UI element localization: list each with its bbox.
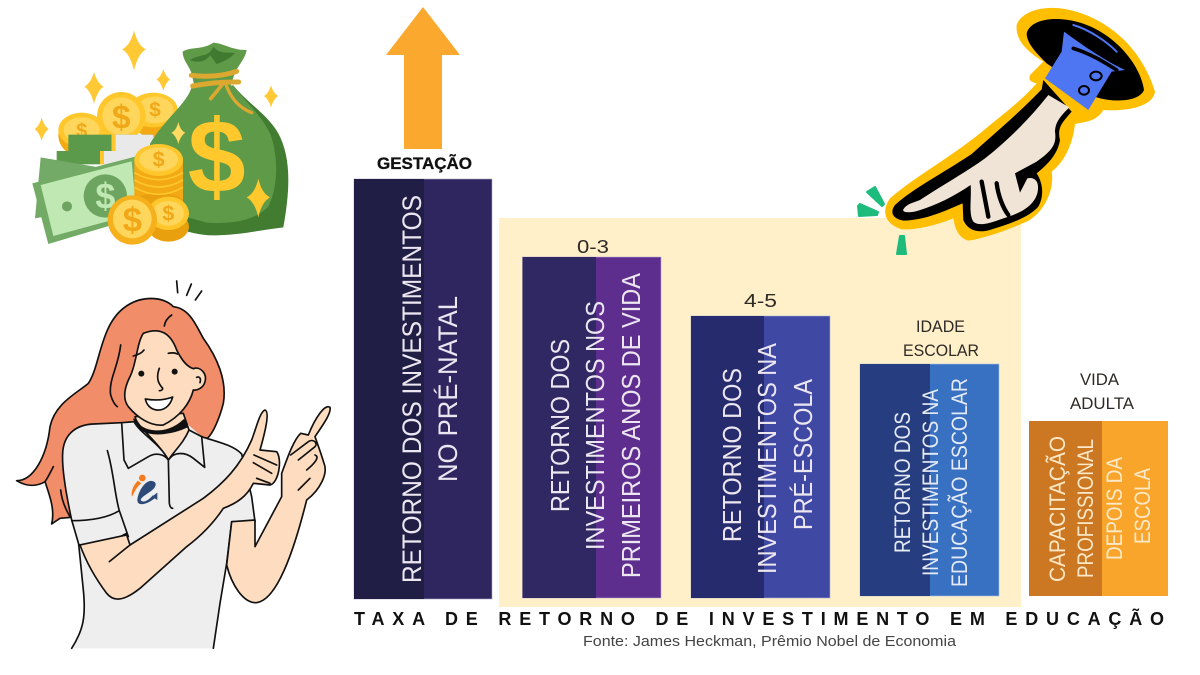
illustration: pointing hand [885,8,1155,241]
front coins: $ [153,148,165,172]
dark opening behind the cuff [1027,19,1144,100]
source note: Fonte: James Heckman, Prêmio Nobel de Economia [583,634,957,650]
collar and zip [122,422,205,468]
bar: vida adulta: VIDA [1080,371,1119,389]
bundled notes [57,135,153,164]
yellow outline [885,8,1155,241]
shirt [63,423,255,648]
bar: vida adulta: PROFISSIONAL [1073,439,1098,578]
bar: 0-3: RETORNO DOS [545,339,575,512]
bar: 4-5 [691,290,830,598]
bar: gestação [354,153,492,599]
bar: idade escolar: IDADE [916,318,965,336]
bar: gestação: RETORNO DOS INVESTIMENTOS [397,195,427,583]
bar: vida adulta: ESCOLA [1130,468,1155,544]
illustration: woman pointing [17,281,330,648]
bar: idade escolar: INVESTIMENTOS NA [918,389,943,576]
hair [17,298,224,524]
chart title: TAXA DE RETORNO DE INVESTIMENTO EM EDUCAÇÃO [354,608,1164,629]
back coins: $ [76,120,87,142]
bar: idade escolar [860,318,999,596]
sparkles [35,31,278,141]
bar: 0-3 [522,236,661,598]
bar: 4-5: INVESTIMENTOS NA [752,342,782,574]
sack [150,43,288,235]
near arm and pointing hand [80,410,279,599]
front coins [108,144,189,245]
bar: 4-5: PRÉ-ESCOLA [788,378,818,530]
sack: $ [188,100,246,216]
banknotes: $ [95,175,115,216]
bar: gestação: GESTAÇÃO [377,153,472,173]
surprise marks [177,281,202,300]
back coins: $ [112,99,131,136]
bar: 0-3: INVESTIMENTOS NOS [580,301,610,550]
bar: 4-5: 4-5 [744,290,777,311]
icon: green emphasis ticks [858,187,906,254]
hand fill [903,95,1069,224]
banknotes [32,157,140,244]
icon: money bag, coins and banknotes [32,31,288,245]
bar: 0-3: 0-3 [577,236,609,257]
blue cuff [1045,32,1125,110]
bar: 4-5: RETORNO DOS [717,368,747,542]
back coins [58,92,178,157]
bar chart [354,153,1168,599]
bar: idade escolar: ESCOLAR [903,342,979,360]
highlight panel: early childhood to school age [499,218,1021,607]
front coins: $ [162,202,174,226]
smile [145,397,173,410]
bar: gestação: NO PRÉ-NATAL [433,296,463,482]
bar: vida adulta [1029,371,1168,596]
front coins: $ [123,201,142,239]
far arm and pointing hand [227,407,330,603]
logo [132,475,157,504]
neck and face [135,413,189,460]
back coins: $ [149,99,161,122]
icon: upward arrow [386,7,460,149]
bar: vida adulta: ADULTA [1070,395,1134,413]
bar: vida adulta: DEPOIS DA [1102,457,1127,560]
bar: idade escolar: RETORNO DOS [890,412,915,553]
hand silhouette [892,80,1072,231]
bar: vida adulta: CAPACITAÇÃO [1045,436,1070,582]
bar: 0-3: PRIMEIROS ANOS DE VIDA [616,272,646,578]
bar: idade escolar: EDUCAÇÃO ESCOLAR [947,378,972,587]
